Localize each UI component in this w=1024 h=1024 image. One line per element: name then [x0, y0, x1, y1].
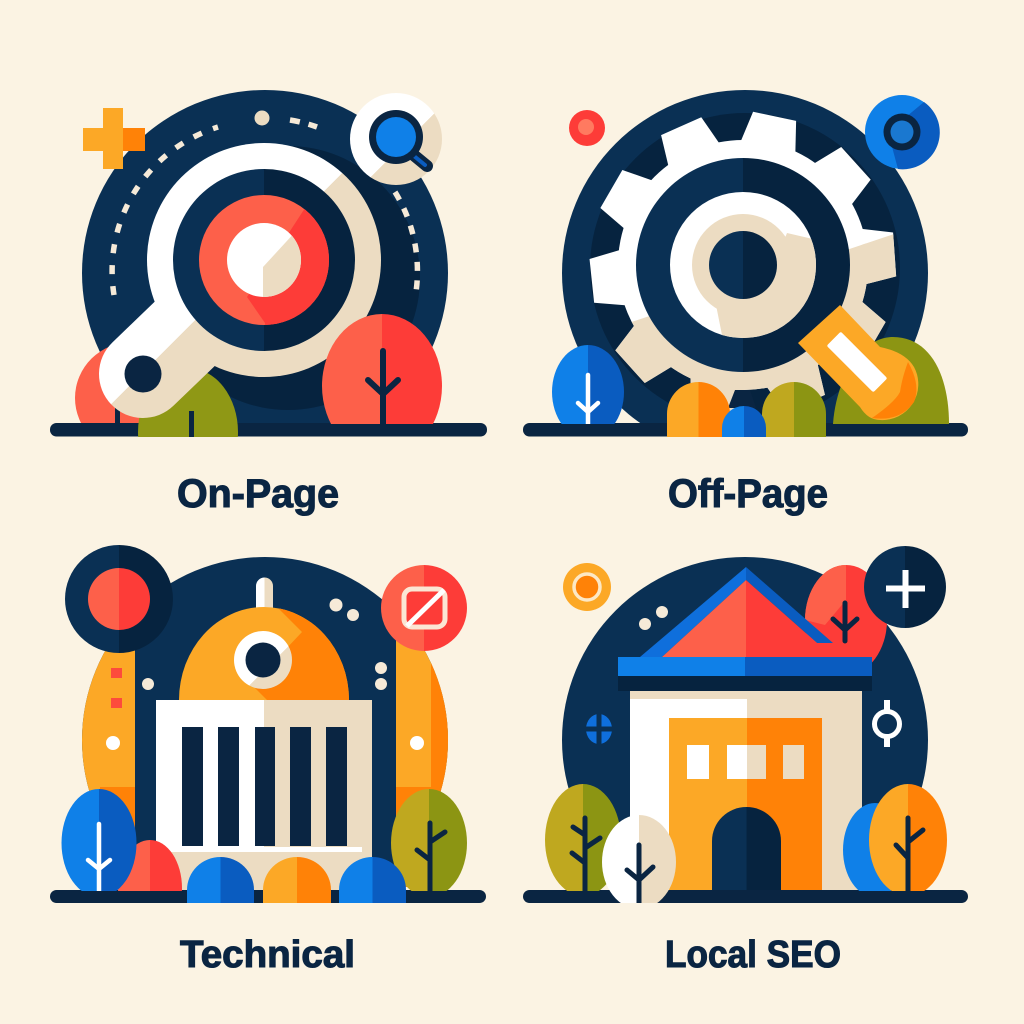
- navy backdrop circle: [82, 90, 448, 456]
- label: Technical: Technical: [180, 934, 355, 976]
- label: On-Page: On-Page: [177, 472, 339, 516]
- magnifier ring: [147, 143, 381, 377]
- tree: olive right: [833, 337, 949, 424]
- gear hub shade: [716, 233, 816, 338]
- top dot: [254, 110, 270, 126]
- panel: Off-Page: [523, 90, 968, 516]
- ground line: [50, 423, 487, 436]
- floating dots: [639, 606, 668, 630]
- orange facade: [669, 718, 822, 890]
- icon: orange plus: [83, 108, 145, 169]
- magnifier: [124, 143, 381, 392]
- ground line: [523, 423, 968, 436]
- icon: red badge: [381, 565, 467, 651]
- gear: [589, 111, 897, 419]
- orange ring: [563, 563, 611, 611]
- tag slot: [827, 332, 887, 392]
- icon: navy badge with red dot: [65, 545, 173, 653]
- orange right wing: [396, 640, 448, 887]
- windows: [687, 745, 804, 779]
- base highlight: [167, 847, 362, 852]
- tree: olive: [545, 784, 621, 896]
- columns: [182, 727, 347, 846]
- icon: orange tag: [798, 305, 918, 420]
- tree: blue: [62, 789, 136, 897]
- bush: blue right: [339, 857, 406, 903]
- label: Off-Page: Off-Page: [668, 472, 828, 516]
- antenna: [256, 578, 273, 608]
- navy backdrop circle: [562, 557, 928, 822]
- gear cream ring: [692, 214, 794, 316]
- wing markers: [106, 668, 424, 750]
- backdrop shadow: [156, 146, 420, 410]
- bush: blue: [722, 406, 766, 437]
- red dot: [569, 110, 605, 146]
- tree: red: [118, 840, 182, 891]
- gear white hub: [670, 192, 816, 338]
- bush: orange: [263, 857, 331, 903]
- house: [630, 691, 862, 892]
- building base: [167, 852, 372, 892]
- ground line: [523, 890, 968, 903]
- bush: orange: [667, 382, 730, 437]
- infographic: four SEO types: [50, 90, 968, 968]
- tree: blue: [843, 803, 892, 891]
- navy badge with plus: [864, 546, 946, 628]
- dome ring: [234, 631, 292, 689]
- icon: white ring marker: [874, 700, 900, 747]
- ground line: [50, 890, 486, 903]
- lens center: [227, 223, 301, 297]
- roof: [618, 567, 872, 691]
- handle hole: [124, 356, 162, 392]
- lens navy: [173, 169, 355, 351]
- dome: [179, 605, 349, 700]
- navy backdrop circle: [562, 90, 928, 456]
- inner dark circle: [590, 113, 900, 423]
- gear navy band: [636, 158, 850, 372]
- floating dots: [142, 598, 387, 690]
- house top band: [630, 691, 862, 699]
- tree: blue: [552, 345, 624, 424]
- orange left wing: [82, 650, 135, 828]
- tree: red behind roof: [805, 565, 887, 675]
- panel: On-Page: [50, 90, 487, 516]
- bush: olive: [762, 382, 826, 437]
- orange right wing shade: [431, 663, 448, 792]
- icon: blue cross: [584, 712, 614, 746]
- eave shadow: [618, 676, 872, 691]
- tree: red left: [75, 347, 140, 423]
- tree: orange: [869, 784, 947, 896]
- building: [156, 700, 372, 892]
- icon: small magnifier badge: [350, 93, 442, 185]
- lens red: [199, 195, 329, 325]
- panel: Technical: [50, 545, 486, 976]
- magnifier handle: [143, 295, 225, 374]
- label: Local SEO: Local SEO: [665, 934, 841, 976]
- tree: white: [602, 815, 676, 909]
- tree: red right: [322, 314, 442, 424]
- door: [712, 807, 781, 892]
- tree: olive: [391, 789, 467, 897]
- navy backdrop circle: [82, 557, 448, 865]
- gear gap: [728, 390, 756, 408]
- tree: olive: [138, 373, 238, 437]
- roof red face: [662, 580, 746, 657]
- bush: blue left: [187, 857, 254, 903]
- gear hole: [709, 231, 777, 299]
- roof eave: [618, 657, 872, 676]
- panel: Local SEO: [523, 546, 968, 976]
- icon: blue badge: [865, 95, 940, 169]
- road dashes: [112, 120, 417, 295]
